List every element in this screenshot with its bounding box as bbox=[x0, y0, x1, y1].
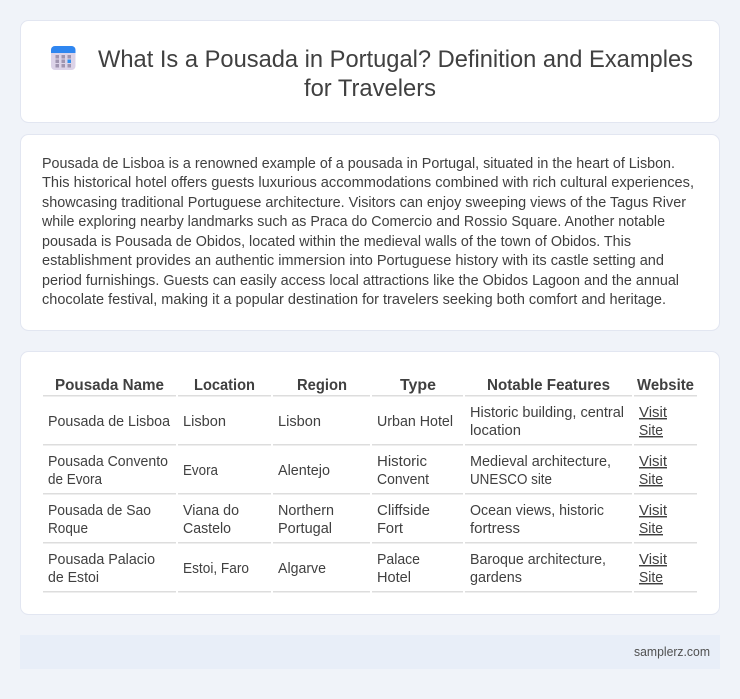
table header row: Location bbox=[194, 377, 255, 394]
panel: table bbox=[20, 352, 720, 614]
table row: Pousada de Sao Roque: Fort bbox=[377, 521, 403, 537]
table header row: Website bbox=[637, 377, 694, 394]
table header row: Type bbox=[400, 377, 436, 394]
table row: Pousada Convento de Evora: Pousada Convento bbox=[48, 454, 168, 470]
table row: Pousada Convento de Evora: Medieval architecture, bbox=[470, 454, 611, 470]
footer bbox=[20, 635, 720, 669]
table header row: Region bbox=[297, 377, 347, 394]
table row: Pousada de Lisboa: Pousada de Lisboa bbox=[48, 414, 171, 430]
table row: Pousada Convento de Evora: Historic bbox=[377, 454, 427, 470]
table row: Pousada Convento de Evora: de Evora bbox=[48, 472, 103, 488]
table row: Pousada Convento de Evora: Visit bbox=[639, 454, 667, 470]
table row: Pousada de Lisboa bbox=[48, 405, 667, 439]
table row: Pousada de Lisboa: location bbox=[470, 423, 521, 439]
table row: Pousada Palacio de Estoi: Hotel bbox=[377, 570, 411, 586]
title bbox=[98, 46, 693, 102]
text block: description paragraph: establishment provides an authentic immersion into Portuguese history with its castle setting and bbox=[42, 253, 664, 269]
text block: description paragraph: period furnishings. Guests can easily access local attractions like the Obidos Lagoon and the annual bbox=[42, 273, 679, 289]
table row: Pousada Palacio de Estoi: de Estoi bbox=[48, 570, 99, 586]
table row: Pousada Convento de Evora bbox=[48, 454, 667, 488]
icon: calendar bbox=[51, 46, 76, 70]
text block: description paragraph: chocolate festival, making it a popular destination for travelers seeking both comfort and heritage. bbox=[42, 292, 666, 308]
table row: Pousada Palacio de Estoi: Palace bbox=[377, 552, 420, 568]
table row: Pousada de Sao Roque: Site bbox=[639, 521, 663, 537]
text block: description paragraph: showcasing traditional Portuguese architecture. Visitors can enjoy sweeping views of the Tagus River bbox=[42, 195, 686, 211]
table row: Pousada Convento de Evora: UNESCO site bbox=[470, 472, 552, 488]
table row: Pousada Convento de Evora: Evora bbox=[183, 463, 219, 479]
table row: Pousada Palacio de Estoi: Baroque architecture, bbox=[470, 552, 606, 568]
table header row: Pousada Name bbox=[55, 377, 164, 394]
table row: Pousada Palacio de Estoi: Algarve bbox=[278, 561, 326, 577]
table row: Pousada de Sao Roque: Castelo bbox=[183, 521, 231, 537]
table row: Pousada de Lisboa: Visit bbox=[639, 405, 667, 421]
table row: Pousada Palacio de Estoi: Visit bbox=[639, 552, 667, 568]
table row: Pousada Convento de Evora: Alentejo bbox=[278, 463, 330, 479]
table row: Pousada de Sao Roque: Portugal bbox=[278, 521, 332, 537]
table row: Pousada de Lisboa: Site bbox=[639, 423, 663, 439]
text block: description paragraph bbox=[41, 156, 694, 308]
table row: Pousada de Sao Roque: Ocean views, historic bbox=[470, 503, 604, 519]
table row: Pousada Palacio de Estoi bbox=[48, 552, 667, 586]
table row: Pousada Convento de Evora: Site bbox=[639, 472, 663, 488]
table header row bbox=[55, 377, 694, 394]
table row: Pousada Palacio de Estoi: Estoi, Faro bbox=[183, 561, 249, 577]
table row: Pousada Palacio de Estoi: Pousada Palacio bbox=[48, 552, 155, 568]
table row: Pousada de Sao Roque: Visit bbox=[639, 503, 667, 519]
text block: description paragraph: Pousada de Lisboa is a renowned example of a pousada in Portugal, situated in the heart of Lisbon. bbox=[42, 156, 675, 172]
table row: Pousada de Sao Roque: Viana do bbox=[183, 503, 239, 519]
table row: Pousada de Lisboa: Lisbon bbox=[183, 414, 226, 430]
panel: description bbox=[20, 134, 720, 330]
table row: Pousada Convento de Evora: Convent bbox=[377, 472, 429, 488]
table row: Pousada Palacio de Estoi: gardens bbox=[470, 570, 522, 586]
table row: Pousada de Lisboa: Lisbon bbox=[278, 414, 321, 430]
text block: description paragraph: while exploring nearby landmarks such as Praca do Comercio and Rossio Square. Another notable bbox=[41, 214, 665, 230]
table row: Pousada de Sao Roque: Northern bbox=[278, 503, 334, 519]
table row: Pousada de Lisboa: Historic building, central bbox=[470, 405, 624, 421]
text block: description paragraph: This historical hotel offers guests luxurious accommodations combined with rich cultural experiences, bbox=[42, 175, 694, 191]
table row: Pousada de Sao Roque bbox=[48, 503, 667, 537]
table row: Pousada de Sao Roque: Pousada de Sao bbox=[48, 503, 151, 519]
text block: description paragraph: pousada is Pousada de Obidos, located within the medieval walls of the town of Obidos. This bbox=[42, 234, 631, 250]
table row: Pousada de Lisboa: Urban Hotel bbox=[377, 414, 453, 430]
table row: Pousada Palacio de Estoi: Site bbox=[639, 570, 663, 586]
table row: Pousada de Sao Roque: fortress bbox=[470, 521, 520, 537]
table row: Pousada de Sao Roque: Cliffside bbox=[377, 503, 430, 519]
title: for Travelers bbox=[304, 75, 436, 102]
footer: samplerz.com bbox=[634, 644, 710, 659]
table row: Pousada de Sao Roque: Roque bbox=[48, 521, 88, 537]
panel: header bbox=[20, 20, 720, 122]
table header row: Notable Features bbox=[487, 377, 610, 394]
title: What Is a Pousada in Portugal? Definition and Examples bbox=[98, 46, 693, 73]
